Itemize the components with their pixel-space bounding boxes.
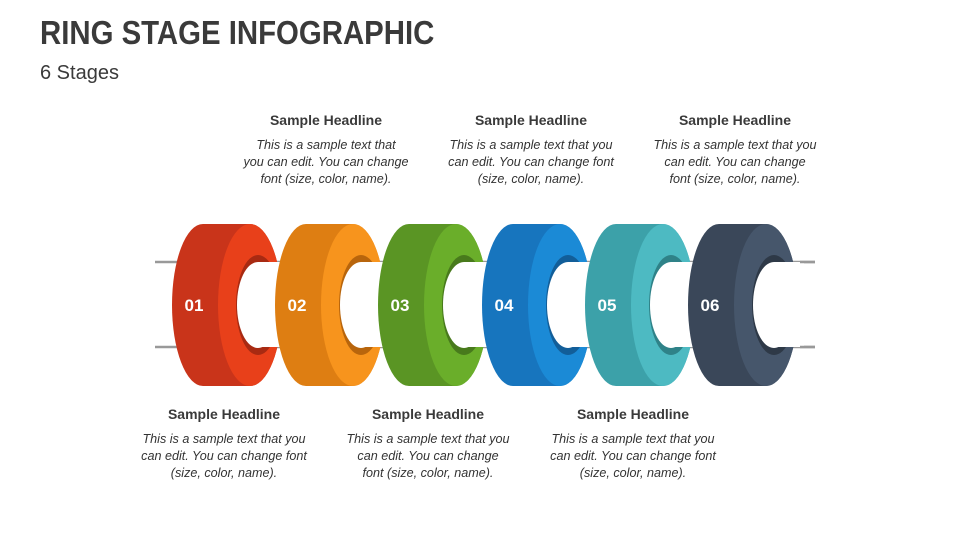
text block: stage 6: This is a sample text that you <box>653 138 817 152</box>
text block: stage 5: (size, color, name). <box>580 466 686 480</box>
ring 03 <box>378 224 494 386</box>
ring 01 <box>172 224 288 386</box>
ring 05: 05 <box>598 296 616 315</box>
band lines <box>155 262 815 347</box>
text block: stage 2: font (size, color, name). <box>261 172 391 186</box>
text block: stage 4: Sample Headline <box>475 112 587 128</box>
text block: stage 1 <box>141 406 308 480</box>
text block: stage 6: can edit. You can change <box>664 155 806 169</box>
title: RING STAGE INFOGRAPHIC <box>40 14 434 51</box>
text block: stage 3: font (size, color, name). <box>363 466 493 480</box>
text block: stage 5: can edit. You can change font <box>550 449 716 463</box>
ring 01: 01 <box>185 296 203 315</box>
subtitle: 6 Stages <box>40 62 119 84</box>
text block: stage 4: (size, color, name). <box>478 172 584 186</box>
text block: stage 1: Sample Headline <box>168 406 280 422</box>
text block: stage 1: can edit. You can change font <box>141 449 307 463</box>
ring 06 <box>688 224 804 386</box>
ring 02 <box>275 224 391 386</box>
text block: stage 6: font (size, color, name). <box>670 172 800 186</box>
text block: stage 2 <box>242 112 409 186</box>
text block: stage 1: This is a sample text that you <box>142 432 306 446</box>
text block: stage 4 <box>448 112 614 186</box>
ring 02: 02 <box>288 296 306 315</box>
text block: stage 3 <box>346 406 510 480</box>
text block: stage 6: Sample Headline <box>679 112 791 128</box>
ring 06: 06 <box>701 296 719 315</box>
text block: stage 3: Sample Headline <box>372 406 484 422</box>
text block: stage 4: This is a sample text that you <box>449 138 613 152</box>
ring 04: 04 <box>495 296 514 315</box>
text block: stage 3: This is a sample text that you <box>346 432 510 446</box>
text block: stage 2: you can edit. You can change <box>243 155 409 169</box>
text block: stage 5 <box>550 406 716 480</box>
text block: stage 5: Sample Headline <box>577 406 689 422</box>
text block: stage 1: (size, color, name). <box>171 466 277 480</box>
ring 05 <box>585 224 701 386</box>
text block: stage 4: can edit. You can change font <box>448 155 614 169</box>
text block: stage 3: can edit. You can change <box>357 449 499 463</box>
text block: stage 5: This is a sample text that you <box>551 432 715 446</box>
band line ends right <box>800 262 815 347</box>
ring 04 <box>482 224 598 386</box>
ring 03: 03 <box>391 296 409 315</box>
text block: stage 6 <box>653 112 817 186</box>
text block: stage 2: This is a sample text that <box>256 138 396 152</box>
text block: stage 2: Sample Headline <box>270 112 382 128</box>
